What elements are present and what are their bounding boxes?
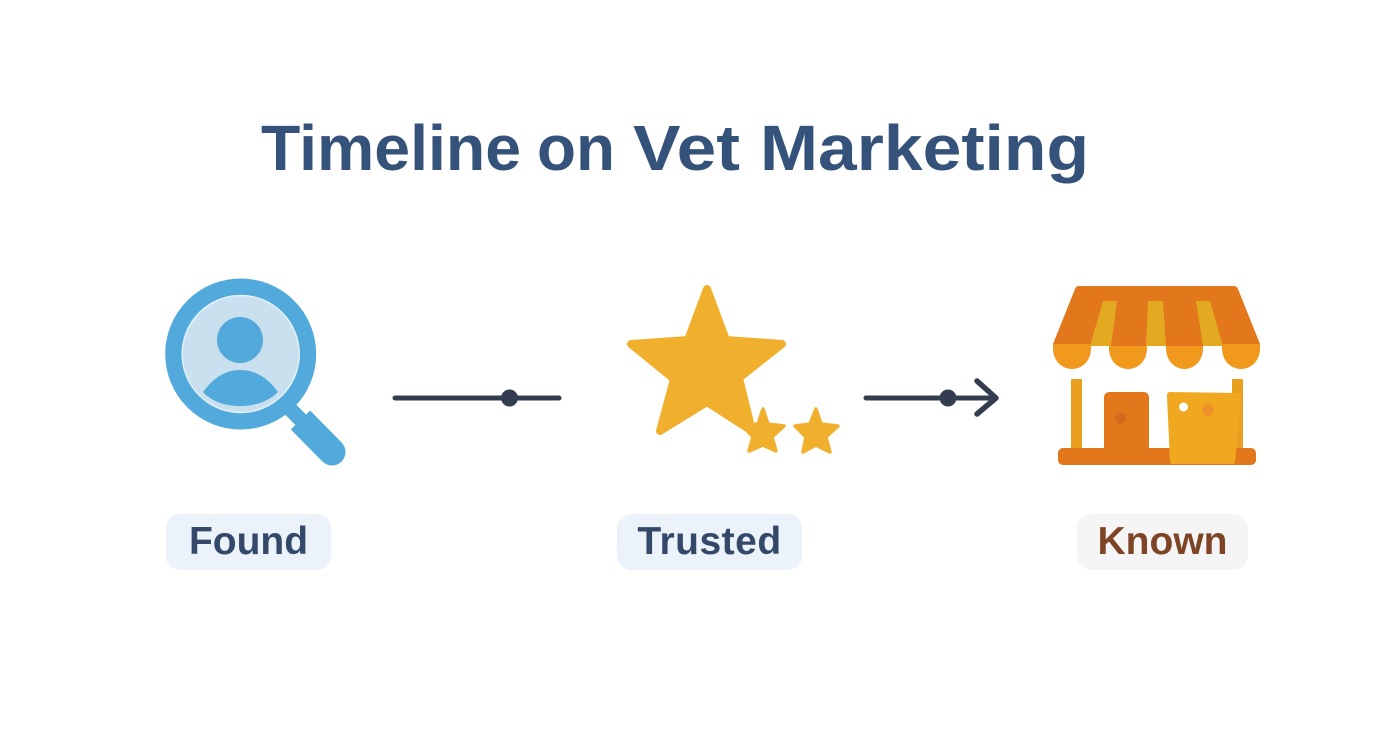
icon: small star right — [795, 409, 838, 452]
title: on — [537, 112, 615, 184]
icon: large star — [631, 289, 782, 431]
connector: line with dot — [395, 390, 559, 406]
window — [1167, 392, 1241, 464]
label: Trusted — [617, 514, 802, 570]
label: Known: Known — [1098, 520, 1227, 563]
base — [1058, 448, 1256, 465]
label: Trusted: Trusted — [637, 520, 782, 563]
title — [261, 112, 1089, 184]
icon: storefront — [1053, 286, 1260, 465]
title: Marketing — [760, 112, 1089, 184]
icon: small star left — [743, 409, 784, 451]
icon: three stars — [631, 289, 838, 452]
posts — [1071, 379, 1082, 451]
awning — [1053, 286, 1260, 346]
door — [1104, 392, 1149, 449]
awning scallops — [1053, 344, 1091, 369]
arrow: line with dot and arrowhead — [866, 381, 996, 414]
icon: magnifying glass with person — [174, 287, 346, 466]
title: Timeline — [261, 112, 521, 184]
label: Known — [1077, 514, 1248, 570]
label: Found — [166, 514, 331, 570]
title: Vet — [633, 112, 740, 184]
label: Found: Found — [189, 520, 308, 563]
